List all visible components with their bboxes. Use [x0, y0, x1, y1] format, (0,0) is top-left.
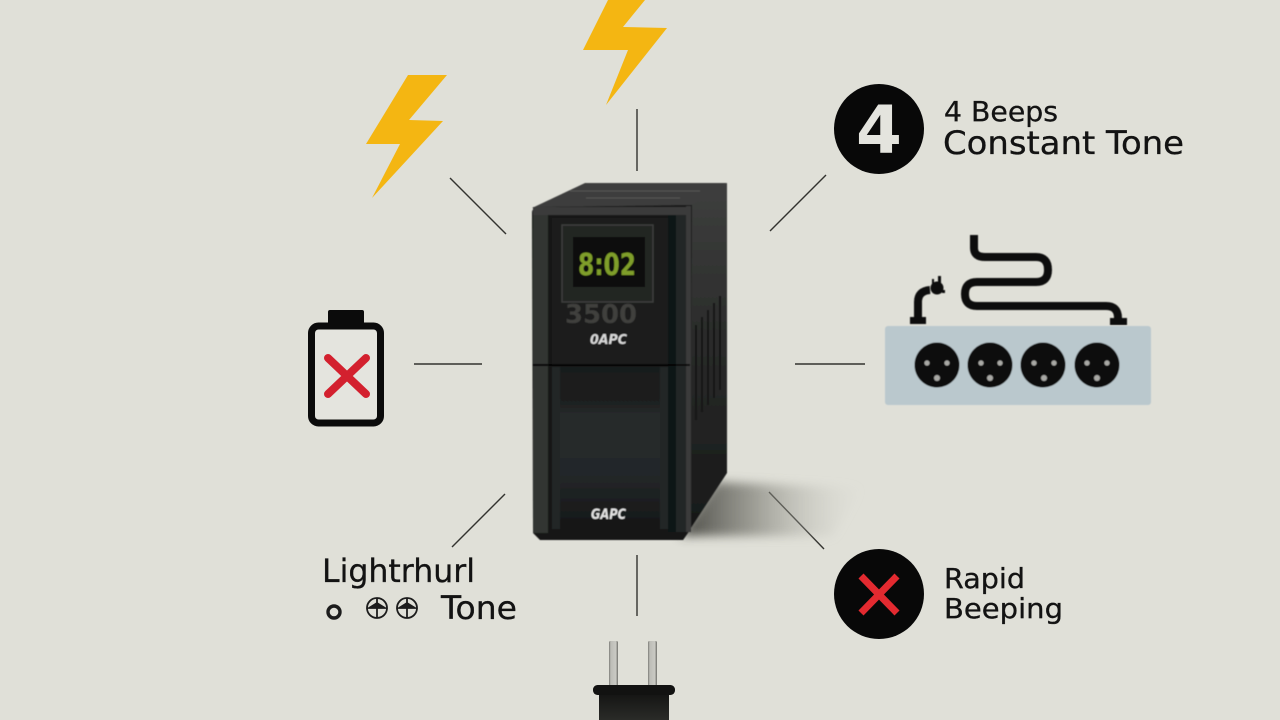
logo lower: GAPC — [591, 507, 627, 523]
badge: number four: 4 — [856, 92, 902, 169]
icon: failed battery — [312, 310, 380, 423]
panel seam — [533, 364, 690, 366]
side face — [683, 183, 727, 540]
connector lines — [414, 109, 865, 616]
display screen — [573, 237, 645, 287]
icon: lightning bolt left — [366, 75, 447, 198]
label: 4 beeps constant tone: Constant Tone — [943, 124, 1184, 162]
coiled cable — [965, 235, 1118, 318]
small tone icons — [328, 598, 417, 618]
top face ridges — [570, 191, 700, 198]
left cable and plug — [910, 276, 945, 324]
socket four — [1074, 342, 1120, 388]
label: 4 beeps constant tone — [943, 95, 1184, 162]
label: rapid beeping: Beeping — [944, 592, 1063, 625]
lower front panel — [552, 367, 668, 529]
UPS device — [532, 183, 727, 540]
label: rapid beeping — [944, 562, 1063, 625]
model number: 3500 — [565, 300, 637, 330]
front top band — [533, 207, 690, 215]
strip body — [885, 326, 1151, 405]
side vents — [696, 296, 720, 420]
icon: power strip — [885, 235, 1151, 405]
label: lightning tone: Tone — [440, 589, 517, 627]
label: lightning tone: Lightrhurl — [322, 552, 475, 590]
display readout: 8:02 — [578, 248, 636, 283]
upper front panel — [552, 218, 668, 364]
logo upper: 0APC — [590, 333, 627, 348]
floor shadow — [680, 482, 862, 536]
front left strip — [533, 209, 548, 533]
front face — [532, 205, 692, 540]
socket two — [968, 342, 1012, 388]
icon: power plug — [593, 641, 675, 720]
badge: red cross — [834, 549, 924, 639]
socket three — [1020, 342, 1066, 388]
socket one — [914, 342, 960, 388]
label: 4 beeps constant tone: 4 Beeps — [944, 95, 1058, 128]
icon: lightning bolt top — [583, 0, 667, 105]
display bezel — [562, 225, 653, 302]
label: lightning tone — [322, 552, 517, 627]
label: rapid beeping: Rapid — [944, 562, 1025, 595]
badge: number four — [834, 84, 924, 174]
front right strip — [668, 215, 676, 532]
top face — [532, 183, 727, 208]
